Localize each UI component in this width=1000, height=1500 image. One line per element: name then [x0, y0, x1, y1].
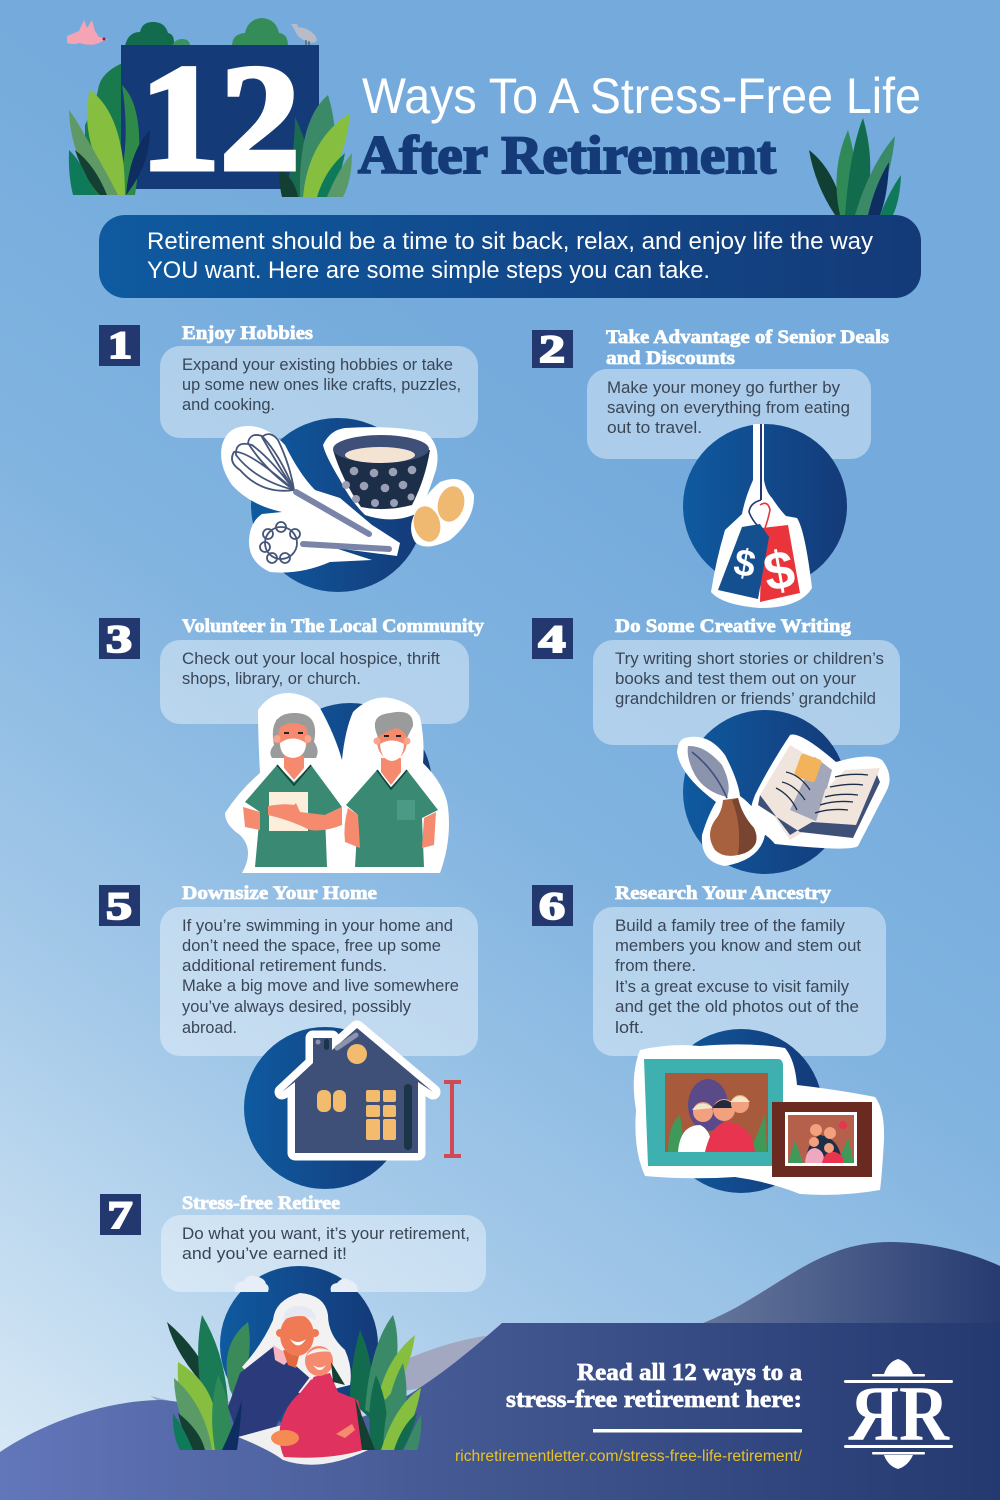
- intro banner: [99, 215, 921, 298]
- heading 7: Stress-free Retiree: [182, 1194, 340, 1214]
- man's face: [280, 1314, 314, 1356]
- house: [282, 1028, 433, 1153]
- red sweater: [280, 1373, 363, 1458]
- body 2: [607, 378, 850, 437]
- body 4: books and test them out on your: [615, 669, 856, 688]
- logo: R: [848, 1370, 899, 1457]
- body 5: don’t need the space, free up some: [182, 936, 441, 955]
- body 5: If you’re swimming in your home and: [182, 916, 453, 935]
- large frame: [644, 1059, 783, 1166]
- heading 1: Enjoy Hobbies: [182, 324, 313, 344]
- body 2: out to travel.: [607, 418, 702, 437]
- cta heading: Read all 12 ways to a: [577, 1360, 802, 1386]
- body 6: Build a family tree of the family: [615, 916, 846, 935]
- background hill: grey ridge: [150, 1335, 492, 1425]
- card 5: [160, 907, 478, 1056]
- icon: pink bird: [67, 20, 108, 45]
- badge 2: [532, 328, 573, 371]
- body 1: and cooking.: [182, 395, 275, 414]
- right leaves: [350, 1315, 421, 1450]
- whisk blob: [221, 426, 400, 573]
- background hill: upper right: [695, 1242, 1000, 1330]
- eggs: [410, 503, 444, 545]
- woman's face: [305, 1346, 333, 1376]
- badge 4: [532, 618, 573, 661]
- intro banner: YOU want. Here are some simple steps you can take.: [147, 257, 710, 284]
- illustration: quill and book: [677, 710, 890, 874]
- body 4: [615, 649, 884, 708]
- heading 5: Downsize Your Home: [182, 884, 377, 904]
- header back trees: [85, 18, 288, 195]
- illustration: price tags: $: [759, 539, 799, 603]
- badge 3: [99, 618, 140, 661]
- body 7: and you’ve earned it!: [182, 1244, 347, 1263]
- heading 2: and Discounts: [606, 349, 735, 369]
- height marker: [444, 1082, 461, 1156]
- body 1: Expand your existing hobbies or take: [182, 355, 453, 374]
- logo: [844, 1359, 953, 1469]
- body 3: [182, 649, 440, 688]
- badge 6: 6: [539, 885, 565, 928]
- cta url: richretirementletter.com/stress-free-life-retirement/: [455, 1448, 803, 1465]
- small whisk: [260, 522, 300, 563]
- title line 1: Ways To A Stress-Free Life: [362, 68, 921, 124]
- navy shirt: [228, 1347, 310, 1442]
- body 3: shops, library, or church.: [182, 669, 361, 688]
- left leaves: [167, 1315, 250, 1450]
- body 2: saving on everything from eating: [607, 398, 850, 417]
- card 3: [160, 640, 469, 724]
- book blob: [750, 735, 890, 849]
- body 5: [182, 916, 459, 1037]
- egg blob: [411, 479, 474, 547]
- badge 2: 2: [539, 328, 565, 371]
- whisk head: [232, 434, 294, 491]
- right plant: [279, 95, 352, 197]
- logo: R: [899, 1370, 950, 1457]
- quill blob: [677, 737, 765, 866]
- ink bottle: [710, 798, 757, 856]
- badge 3: 3: [106, 618, 132, 661]
- heading 6: Research Your Ancestry: [615, 884, 832, 904]
- badge 6: [532, 885, 573, 928]
- small frame: [772, 1102, 872, 1177]
- big number 12: 12: [140, 34, 300, 202]
- quill: [688, 746, 729, 797]
- card 7: [161, 1215, 486, 1292]
- white wave: [238, 1420, 368, 1465]
- bowl: [333, 450, 430, 509]
- badge 4: 4: [538, 618, 566, 661]
- card 2: [587, 369, 871, 459]
- cta heading: [506, 1360, 802, 1413]
- step 2: senior deals: [532, 328, 889, 608]
- heading 4: Do Some Creative Writing: [615, 617, 852, 637]
- body 6: loft.: [615, 1018, 644, 1037]
- bowl blob: [323, 427, 438, 519]
- body 1: up some new ones like crafts, puzzles,: [182, 375, 461, 394]
- card 4: [593, 640, 900, 745]
- card 1: [160, 346, 478, 438]
- right volunteer: [344, 712, 438, 867]
- heading 2: Take Advantage of Senior Deals: [606, 328, 889, 348]
- body 6: and get the old photos out of the: [615, 997, 859, 1016]
- illustration: baking tools: [221, 418, 474, 592]
- book: [760, 745, 832, 840]
- badge 1: [99, 324, 140, 367]
- step 5: downsize home: [99, 884, 478, 1189]
- step 3: volunteer: [99, 617, 485, 873]
- top right plant: [809, 118, 901, 215]
- badge 5: [99, 885, 140, 928]
- icon: grey bird: [291, 24, 319, 46]
- body 7: [182, 1224, 470, 1263]
- heading 3: Volunteer in The Local Community: [182, 617, 485, 637]
- body 4: Try writing short stories or children’s: [615, 649, 884, 668]
- badge 7: 7: [108, 1194, 132, 1237]
- house windows: [317, 1044, 396, 1140]
- step 6: ancestry: [532, 884, 886, 1195]
- illustration: house: [244, 1027, 461, 1189]
- body 5: Make a big move and live somewhere: [182, 976, 459, 995]
- step 7: stress-free retiree: [100, 1194, 486, 1465]
- white hair: [242, 1293, 351, 1395]
- clouds: [235, 1276, 358, 1292]
- card 6: [593, 907, 886, 1056]
- body 5: abroad.: [182, 1018, 237, 1037]
- illustration: price tags: $: [731, 541, 759, 586]
- body 6: [615, 916, 861, 1037]
- illustration: price tags: [683, 424, 847, 608]
- badge 7: [100, 1194, 141, 1237]
- body 5: additional retirement funds.: [182, 956, 387, 975]
- number block: [121, 45, 319, 189]
- heading 2: [606, 328, 889, 369]
- left plant: [69, 85, 150, 195]
- body 4: grandchildren or friends’ grandchild: [615, 689, 876, 708]
- header: [67, 18, 921, 215]
- couple: [222, 1293, 375, 1465]
- illustration: volunteers: [225, 693, 449, 873]
- footer call to action: [455, 1360, 803, 1465]
- cta heading: stress-free retirement here:: [506, 1387, 802, 1413]
- badge 5: 5: [106, 885, 132, 928]
- illustration: retired couple: [167, 1266, 421, 1465]
- step 1: enjoy hobbies: [99, 324, 478, 592]
- title line 2: After Retirement: [358, 125, 776, 185]
- step 4: creative writing: [532, 617, 900, 874]
- body 6: members you know and stem out: [615, 936, 861, 955]
- intro banner: Retirement should be a time to sit back, relax, and enjoy life the way: [147, 228, 873, 255]
- body 5: you’ve always desired, possibly: [182, 997, 412, 1016]
- illustration: family photos: [634, 1029, 884, 1195]
- body 6: It’s a great excuse to visit family: [615, 977, 850, 996]
- cta rule: [593, 1429, 802, 1432]
- badge 1: 1: [108, 324, 132, 367]
- body 7: Do what you want, it’s your retirement,: [182, 1224, 470, 1243]
- body 2: Make your money go further by: [607, 378, 841, 397]
- woman's hair: [296, 1348, 330, 1380]
- body 3: Check out your local hospice, thrift: [182, 649, 440, 668]
- body 1: [182, 355, 461, 414]
- footer wave panel: [0, 1323, 1000, 1500]
- left volunteer: [243, 713, 342, 867]
- body 6: from there.: [615, 956, 696, 975]
